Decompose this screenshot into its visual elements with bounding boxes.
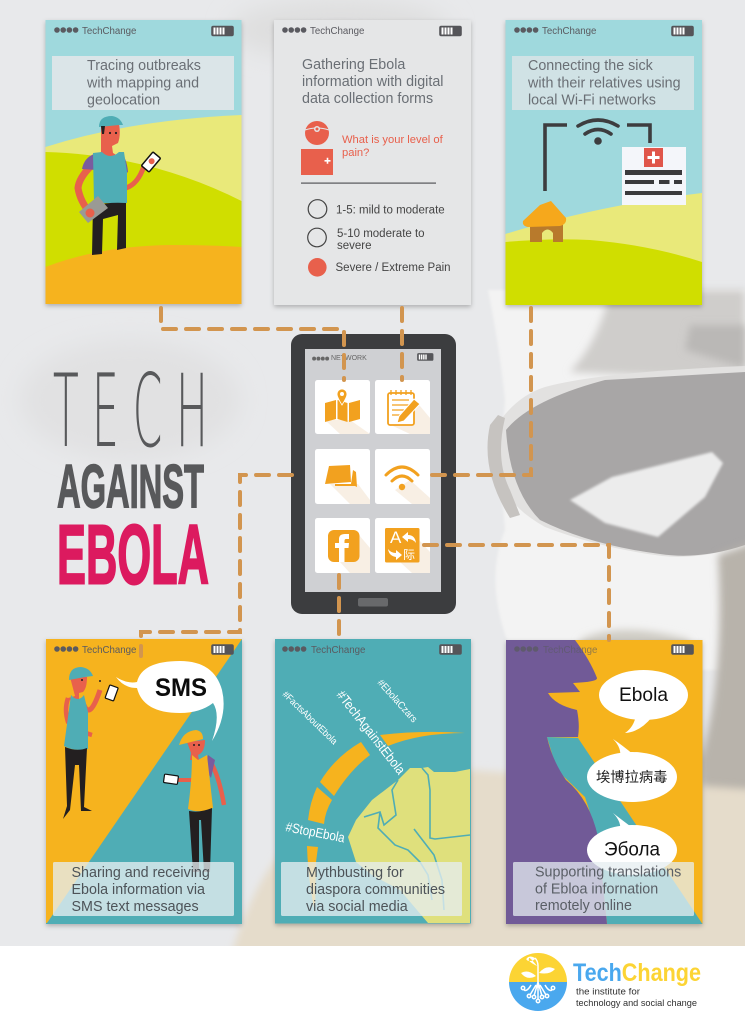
dashed connectors from apps to panels [141, 308, 609, 656]
app: chat [315, 449, 370, 504]
speech bubble: SMS: SMS [155, 674, 207, 702]
status bar [514, 26, 693, 37]
central smartphone [291, 334, 456, 614]
title: Tech Against Ebola: EBOLA [57, 508, 209, 602]
diagonal yellow field [46, 639, 242, 923]
app: facebook [315, 518, 370, 573]
hashtags: #EbolaCzars [375, 678, 419, 725]
status bar: TechChange [82, 26, 136, 37]
caption: data collection forms [302, 91, 433, 107]
map of West Africa [348, 767, 470, 923]
caption box: via social media [306, 899, 408, 915]
app: wifi [375, 449, 430, 504]
speech bubble: Ebola [599, 670, 688, 733]
home button [358, 598, 388, 606]
option: moderate [308, 228, 425, 252]
caption: information with digital [302, 74, 443, 90]
caption box: Supporting translations [535, 864, 681, 880]
caption box [52, 56, 234, 110]
caption box [53, 862, 234, 916]
speech bubble: Chinese: 埃博拉病毒 [596, 769, 667, 786]
caption box [513, 862, 694, 916]
orange hill [46, 245, 242, 304]
phone status bar: NETWORK [331, 355, 367, 362]
caption box: SMS text messages [72, 899, 199, 915]
purple face silhouette [506, 640, 607, 924]
caption box: with their relatives using [527, 76, 681, 92]
caption box: Connecting the sick [528, 58, 654, 74]
arc segments [307, 732, 465, 913]
panel: social media mythbusting [275, 639, 471, 924]
connector brackets [545, 125, 650, 191]
option: moderate: severe [337, 240, 372, 252]
caption box: Ebola information via [72, 882, 205, 898]
panel: SMS messages [46, 639, 242, 924]
status bar [54, 26, 233, 37]
status bar: TechChange [311, 645, 365, 656]
phone status bar [312, 354, 433, 362]
figure: left, with phone [63, 667, 118, 819]
status bar: TechChange [82, 645, 136, 656]
icon: hut [523, 201, 566, 242]
status bar [282, 26, 461, 37]
caption [302, 57, 443, 107]
logo tagline: the institute for [576, 986, 640, 996]
question [342, 134, 444, 159]
teal neck shape [547, 737, 702, 924]
yellow hill [46, 115, 242, 210]
green hill [46, 152, 242, 280]
caption: Gathering Ebola [302, 57, 405, 73]
hashtags: #StopEbola [284, 819, 347, 845]
hashtags: #FactsAboutEbola [280, 689, 340, 748]
title: Tech Against Ebola: AGAINST [57, 452, 204, 520]
icon: medical record [622, 147, 686, 205]
caption box: geolocation [87, 92, 160, 108]
panel: digital data collection form [274, 20, 471, 305]
panel: remote translation [506, 640, 702, 924]
option: severe: Severe / Extreme Pain [336, 262, 451, 274]
app: notepad [375, 380, 430, 434]
status bar [54, 645, 233, 656]
hashtags [280, 678, 419, 845]
caption box: with mapping and [86, 76, 199, 92]
caption box: Sharing and receiving [72, 865, 210, 881]
status bar: TechChange [542, 26, 596, 37]
speech bubble: Ebola: Ebola [619, 684, 668, 706]
option: mild: 1-5: mild to moderate [336, 204, 445, 216]
status bar [514, 645, 693, 656]
panel: wi-fi connection [506, 20, 702, 305]
option: moderate: 5-10 moderate to [337, 228, 425, 240]
app: translate [375, 518, 430, 573]
green hill [506, 239, 702, 305]
caption box: diaspora communities [306, 882, 445, 898]
caption box: of Ebloa infornation [535, 882, 658, 898]
question: What is your level of [342, 134, 444, 146]
app: translate: A [390, 528, 402, 547]
caption box: Tracing outbreaks [87, 58, 201, 74]
title: Tech Against Ebola: TECH [53, 353, 208, 471]
status bar [282, 645, 461, 656]
status bar: TechChange [543, 645, 597, 656]
speech bubble: Russian [587, 813, 677, 875]
map borders [364, 768, 470, 910]
figure with phone [78, 116, 161, 255]
speech bubble: Russian: Эбола [604, 838, 660, 860]
title: Tech Against Ebola [53, 353, 209, 602]
yellow hill [506, 193, 702, 262]
footer band with logo [0, 946, 745, 1024]
caption box [281, 862, 462, 916]
status bar: TechChange [310, 26, 364, 37]
logo tagline [576, 986, 697, 1008]
logo tagline: technology and social change [576, 998, 697, 1008]
caption box: local Wi-Fi networks [528, 92, 656, 108]
question: pain? [342, 147, 369, 159]
caption box: remotely online [535, 898, 632, 914]
panel: tracing outbreaks [46, 20, 242, 304]
option: mild [308, 200, 445, 218]
hashtags: #TechAgainstEbola [334, 688, 409, 778]
option: severe [308, 258, 451, 277]
caption box [512, 56, 694, 110]
icon: wifi [578, 120, 618, 145]
app: translate: 际 [403, 548, 415, 562]
app: map [315, 380, 370, 434]
speech bubble: Chinese [587, 739, 677, 802]
figure: right, with phone [163, 730, 224, 872]
caption box: Mythbusting for [306, 865, 404, 881]
logo: TechChange mark [509, 953, 567, 1011]
speech bubble: SMS [116, 661, 224, 741]
icon: patient [301, 121, 333, 175]
logo wordmark: TechChange [573, 959, 701, 987]
